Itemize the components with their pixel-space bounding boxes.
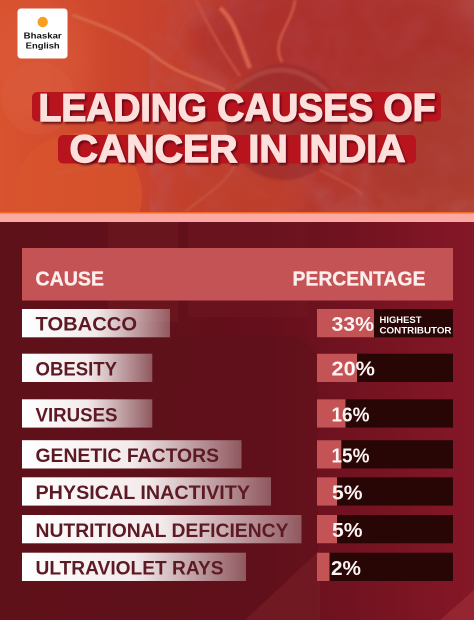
row: physical inactivity: PHYSICAL INACTIVITY bbox=[36, 483, 250, 504]
table header: PERCENTAGE bbox=[292, 268, 426, 290]
row: nutritional deficiency: 5% bbox=[332, 520, 363, 542]
cancer cell bbox=[50, 0, 362, 212]
title: LEADING CAUSES OF bbox=[38, 87, 436, 130]
logo badge: English bbox=[26, 42, 60, 50]
row: genetic factors: 15% bbox=[332, 445, 370, 467]
logo badge: Bhaskar bbox=[24, 32, 62, 40]
row: genetic factors: GENETIC FACTORS bbox=[36, 446, 219, 467]
row: physical inactivity bbox=[22, 477, 453, 506]
row: genetic factors bbox=[22, 440, 453, 468]
row: viruses: VIRUSES bbox=[36, 405, 118, 426]
row: nutritional deficiency bbox=[22, 515, 453, 543]
row: ultraviolet rays: 2% bbox=[331, 558, 361, 580]
table header: CAUSE bbox=[36, 268, 104, 290]
blood cells bbox=[50, 164, 142, 212]
divider band bbox=[0, 212, 474, 222]
lower panel background bbox=[0, 222, 474, 620]
hero photo background bbox=[0, 0, 474, 212]
row: obesity: OBESITY bbox=[36, 360, 117, 380]
logo badge bbox=[18, 8, 68, 58]
row: ultraviolet rays: ULTRAVIOLET RAYS bbox=[36, 558, 224, 580]
title: CANCER IN INDIA bbox=[70, 128, 406, 171]
row: obesity bbox=[22, 354, 453, 382]
row: tobacco: CONTRIBUTOR bbox=[380, 326, 452, 336]
row: viruses bbox=[22, 399, 453, 428]
row: physical inactivity: 5% bbox=[332, 482, 363, 504]
row: tobacco: 33% bbox=[332, 314, 374, 336]
callout: highest contributor: HIGHEST bbox=[380, 315, 422, 326]
row: tobacco bbox=[22, 309, 453, 337]
title bbox=[32, 87, 441, 171]
row: nutritional deficiency: NUTRITIONAL DEFICIENCY bbox=[36, 521, 289, 542]
row: obesity: 20% bbox=[332, 358, 375, 380]
row: viruses: 16% bbox=[332, 404, 370, 426]
row: tobacco: TOBACCO bbox=[36, 314, 137, 336]
table header bbox=[22, 248, 453, 300]
row: ultraviolet rays bbox=[22, 553, 453, 581]
